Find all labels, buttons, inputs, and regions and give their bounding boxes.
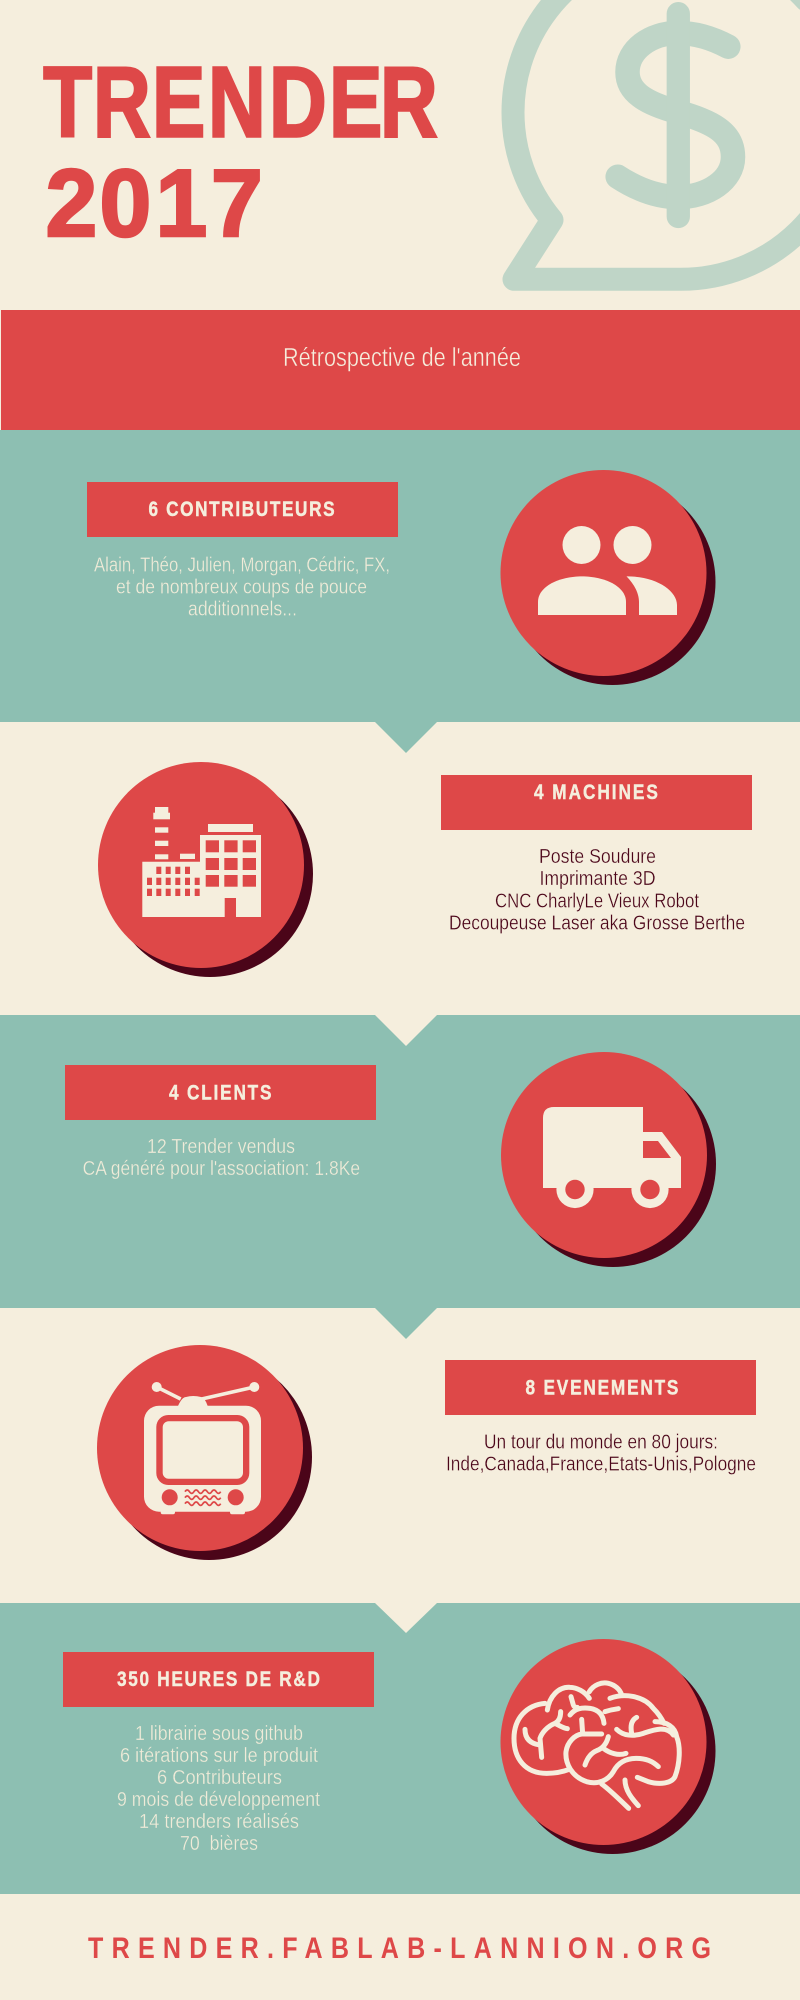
- text: R&D details: 14 trenders réalisés: [139, 1810, 299, 1833]
- text: contributors list: Alain, Théo, Julien, Morgan, Cédric, FX,: [94, 554, 390, 576]
- heading: 4 machines: 4 MACHINES: [534, 782, 658, 804]
- heading: 6 contributeurs: 6 CONTRIBUTEURS: [148, 499, 335, 521]
- heading: 8 evenements: 8 EVENEMENTS: [526, 1377, 679, 1400]
- text: R&D details: 1 librairie sous github: [135, 1722, 303, 1745]
- text: contributors list: [94, 554, 390, 620]
- panel: evenements: [0, 1308, 800, 1603]
- text: machines list: Imprimante 3D: [540, 867, 656, 890]
- text: events details: [446, 1430, 756, 1476]
- title: [43, 47, 438, 257]
- text: events details: Un tour du monde en 80 jours:: [484, 1430, 718, 1454]
- subtitle band: Rétrospective de l'année: [283, 344, 521, 372]
- pointer arrow: [375, 722, 437, 753]
- icon: speech bubble with dollar sign: [513, 0, 800, 279]
- pointer arrow: [375, 1308, 437, 1339]
- icon: television: [97, 1345, 312, 1560]
- text: R&D details: 6 itérations sur le produit: [120, 1744, 318, 1767]
- heading: 4 machines: [441, 775, 752, 830]
- pointer arrow: [375, 1015, 437, 1046]
- panel: contributeurs: [0, 430, 800, 722]
- pointer arrow: [375, 1603, 437, 1633]
- text: machines list: CNC CharlyLe Vieux Robot: [495, 890, 699, 912]
- panel: machines: [0, 722, 800, 1015]
- page header: [0, 0, 800, 310]
- heading: 4 clients: 4 CLIENTS: [169, 1082, 272, 1105]
- subtitle band: [1, 310, 800, 430]
- text: R&D details: 70 bières: [180, 1832, 258, 1855]
- heading: 8 evenements: [445, 1360, 756, 1415]
- text: clients details: 12 Trender vendus: [147, 1135, 295, 1158]
- text: clients details: [83, 1135, 360, 1180]
- text: R&D details: 9 mois de développement: [117, 1788, 320, 1811]
- title: TRENDER: [43, 47, 438, 159]
- panel: clients: [0, 1015, 800, 1308]
- footer: [0, 1894, 800, 2000]
- icon: brain: [500, 1639, 716, 1854]
- text: machines list: Decoupeuse Laser aka Grosse Berthe: [449, 912, 745, 934]
- icon: factory: [98, 762, 313, 977]
- icon: truck: [501, 1052, 716, 1267]
- text: machines list: [449, 845, 745, 934]
- heading: 350 heures de R&D: [63, 1652, 374, 1707]
- text: R&D details: [117, 1722, 320, 1855]
- heading: 6 contributeurs: [87, 482, 398, 537]
- footer url: TRENDER.FABLAB-LANNION.ORG: [88, 1931, 711, 1964]
- icon: people: [500, 470, 716, 685]
- text: machines list: Poste Soudure: [539, 845, 656, 868]
- text: contributors list: additionnels...: [188, 598, 297, 620]
- heading: 350 heures de R&D: 350 HEURES DE R&D: [117, 1669, 320, 1691]
- title: 2017: [45, 150, 263, 257]
- text: clients details: CA généré pour l'association: 1.8Ke: [83, 1157, 360, 1180]
- text: R&D details: 6 Contributeurs: [157, 1766, 282, 1789]
- panel: recherche et developpement: [0, 1603, 800, 1894]
- heading: 4 clients: [65, 1065, 376, 1120]
- text: contributors list: et de nombreux coups de pouce: [116, 576, 367, 598]
